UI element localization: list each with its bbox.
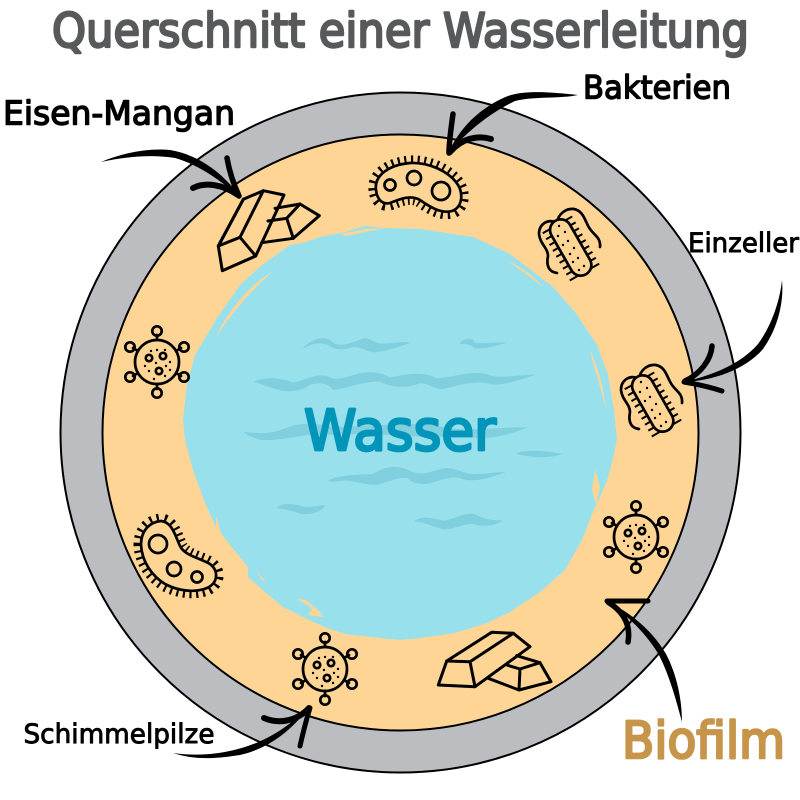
water ripples — [243, 338, 563, 529]
icon: iron-manganese deposit upper left — [218, 191, 319, 271]
icon: single-celled organism right — [621, 365, 682, 429]
title: Querschnitt einer Wasserleitung — [52, 4, 749, 59]
icon: mould spore left — [125, 326, 189, 398]
icon: mould spore right — [604, 501, 668, 573]
label: Einzeller: Einzeller — [688, 228, 800, 259]
icon: bacterium lower left — [141, 521, 216, 591]
pipe wall — [60, 92, 740, 772]
biofilm layer — [102, 134, 698, 730]
icon: bacterium top — [376, 163, 461, 212]
water body — [183, 226, 617, 640]
arrow: Einzeller — [683, 280, 782, 391]
arrow: Eisen-Mangan — [101, 150, 240, 197]
icon: single-celled organism upper right — [539, 209, 600, 273]
label: Biofilm: Biofilm — [622, 712, 785, 771]
label: Schimmelpilze: Schimmelpilze — [24, 719, 214, 750]
arrow: Schimmelpilze — [173, 706, 310, 758]
label: Wasser: Wasser — [304, 399, 497, 464]
icon: iron-manganese deposit bottom — [438, 632, 551, 690]
label: Eisen-Mangan: Eisen-Mangan — [3, 94, 235, 132]
label: Bakterien: Bakterien — [583, 68, 731, 106]
arrow: Bakterien — [448, 92, 578, 154]
icon: mould spore bottom — [293, 633, 357, 705]
arrow: Biofilm — [606, 601, 682, 722]
